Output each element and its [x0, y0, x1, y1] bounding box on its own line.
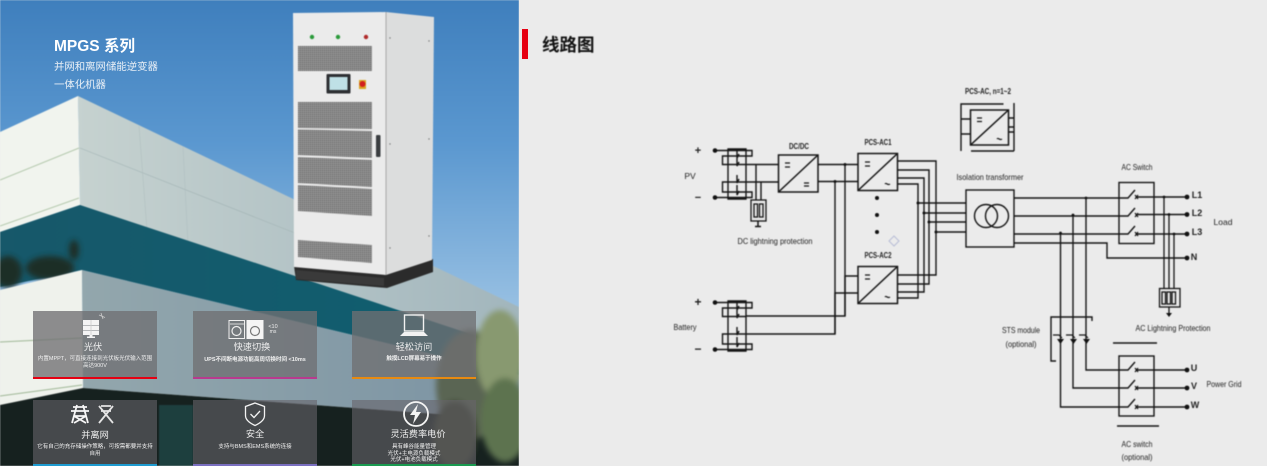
AC switch and power grid: W — [1191, 400, 1200, 410]
panel: product photo — [0, 0, 519, 466]
accent bar — [352, 376, 476, 379]
icon: UPS machines — [228, 320, 278, 339]
isolation transformer — [956, 172, 1024, 247]
card text: 触摸LCD屏幕易于操作 — [386, 356, 442, 362]
card title: 并离网 — [81, 430, 109, 440]
product: inverter cabinet — [292, 11, 435, 289]
heading: product name: MPGS 系列 — [54, 38, 135, 55]
icon: shield — [244, 402, 266, 426]
accent bar — [193, 464, 317, 466]
accent bar — [522, 29, 528, 59]
icon: UPS machines: <10 — [268, 324, 278, 330]
group: PV input — [684, 145, 813, 246]
card text: UPS不间断电源功能高周切换时间 <10ms — [204, 357, 306, 363]
parallel module dots — [875, 196, 879, 234]
card text: 光伏+主电源负载模式 — [388, 450, 440, 456]
card: fast switching — [193, 311, 317, 379]
PCS-AC2 module: PCS-AC2 — [864, 251, 892, 260]
AC switch and power grid: (optional) — [1122, 452, 1153, 462]
card: on and off grid — [33, 400, 157, 466]
group: PV input: PV — [684, 171, 696, 181]
panel: circuit diagram — [519, 0, 1267, 466]
PCS-AC1 module: PCS-AC1 — [864, 138, 892, 147]
DC/DC converter: DC/DC — [789, 142, 809, 151]
icon: UPS machines: ms — [270, 329, 277, 335]
STS module: (optional) — [1006, 339, 1037, 349]
group: battery input — [674, 276, 858, 356]
AC switch and power grid: AC switch — [1122, 439, 1153, 449]
card: photovoltaic — [33, 311, 157, 379]
icon: solar panel — [83, 312, 106, 338]
AC lightning protection — [1136, 196, 1211, 333]
icon: pylons — [71, 404, 114, 424]
AC switch and load outputs: L3 — [1192, 227, 1202, 237]
accent bar — [33, 464, 157, 466]
icon: lightning bolt — [403, 401, 429, 427]
accent bar — [193, 376, 317, 379]
accent bar — [352, 464, 476, 466]
group: battery input: Battery — [674, 323, 696, 332]
background: sky and building — [0, 0, 519, 466]
heading: circuit diagram: 线路图 — [542, 35, 594, 55]
card title: 轻松访问 — [396, 342, 432, 352]
card text: 它有自己的充存储操作策略，可按需都要并支持自用 — [37, 444, 153, 456]
AC output bus — [897, 161, 966, 298]
card title: 灵活费率电价 — [390, 429, 446, 439]
card: flexible tariff — [352, 400, 476, 466]
AC switch and power grid: V — [1191, 381, 1197, 391]
card text — [388, 443, 440, 463]
PCS-AC2 module — [858, 251, 898, 304]
subheading: product description: 一体化机器 — [54, 80, 106, 91]
PCS-AC optional module — [961, 87, 1014, 151]
AC switch and load outputs: AC Switch — [1122, 162, 1153, 172]
AC switch and power grid: Power Grid — [1206, 379, 1242, 389]
card: safety — [193, 400, 317, 466]
card text: 具有峰谷能量管理 — [392, 444, 436, 450]
card text: 光伏+电池负载模式 — [390, 457, 438, 463]
accent bar — [33, 376, 157, 379]
PCS-AC1 module — [818, 138, 898, 334]
card title: 安全 — [246, 429, 264, 439]
card title: 光伏 — [84, 342, 102, 352]
STS module — [1002, 197, 1135, 407]
STS module: STS module — [1002, 325, 1040, 335]
group: PV input: − — [695, 192, 701, 204]
diamond mark — [889, 236, 899, 246]
icon: laptop — [400, 314, 428, 336]
DC/DC converter — [778, 142, 818, 192]
card text: 内置MPPT，可直接连接到光伏板光伏输入范围高达900V — [38, 356, 152, 368]
AC lightning protection: AC Lightning Protection — [1136, 323, 1211, 333]
PCS-AC optional module: PCS-AC, n=1~2 — [965, 87, 1011, 96]
card: easy access — [352, 311, 476, 379]
group: PV input: DC lightning protection — [738, 236, 813, 246]
subheading: product description — [54, 61, 158, 91]
AC switch and load outputs: L1 — [1192, 190, 1202, 200]
subheading: product description: 并网和离网储能逆变器 — [54, 62, 158, 73]
card title: 快速切换 — [234, 342, 270, 352]
group: battery input: − — [694, 342, 702, 356]
AC switch and load outputs: L2 — [1192, 208, 1202, 218]
group: PV input: + — [695, 145, 701, 157]
AC switch and power grid — [1113, 343, 1242, 462]
isolation transformer: Isolation transformer — [956, 172, 1024, 182]
AC switch and load outputs: Load — [1214, 217, 1233, 227]
AC switch and load outputs — [1014, 162, 1233, 262]
card text: 支持与BMS和EMS系统的连接 — [218, 444, 292, 450]
group: battery input: + — [694, 295, 702, 309]
AC switch and load outputs: N — [1191, 252, 1197, 262]
AC switch and power grid: U — [1191, 363, 1197, 373]
